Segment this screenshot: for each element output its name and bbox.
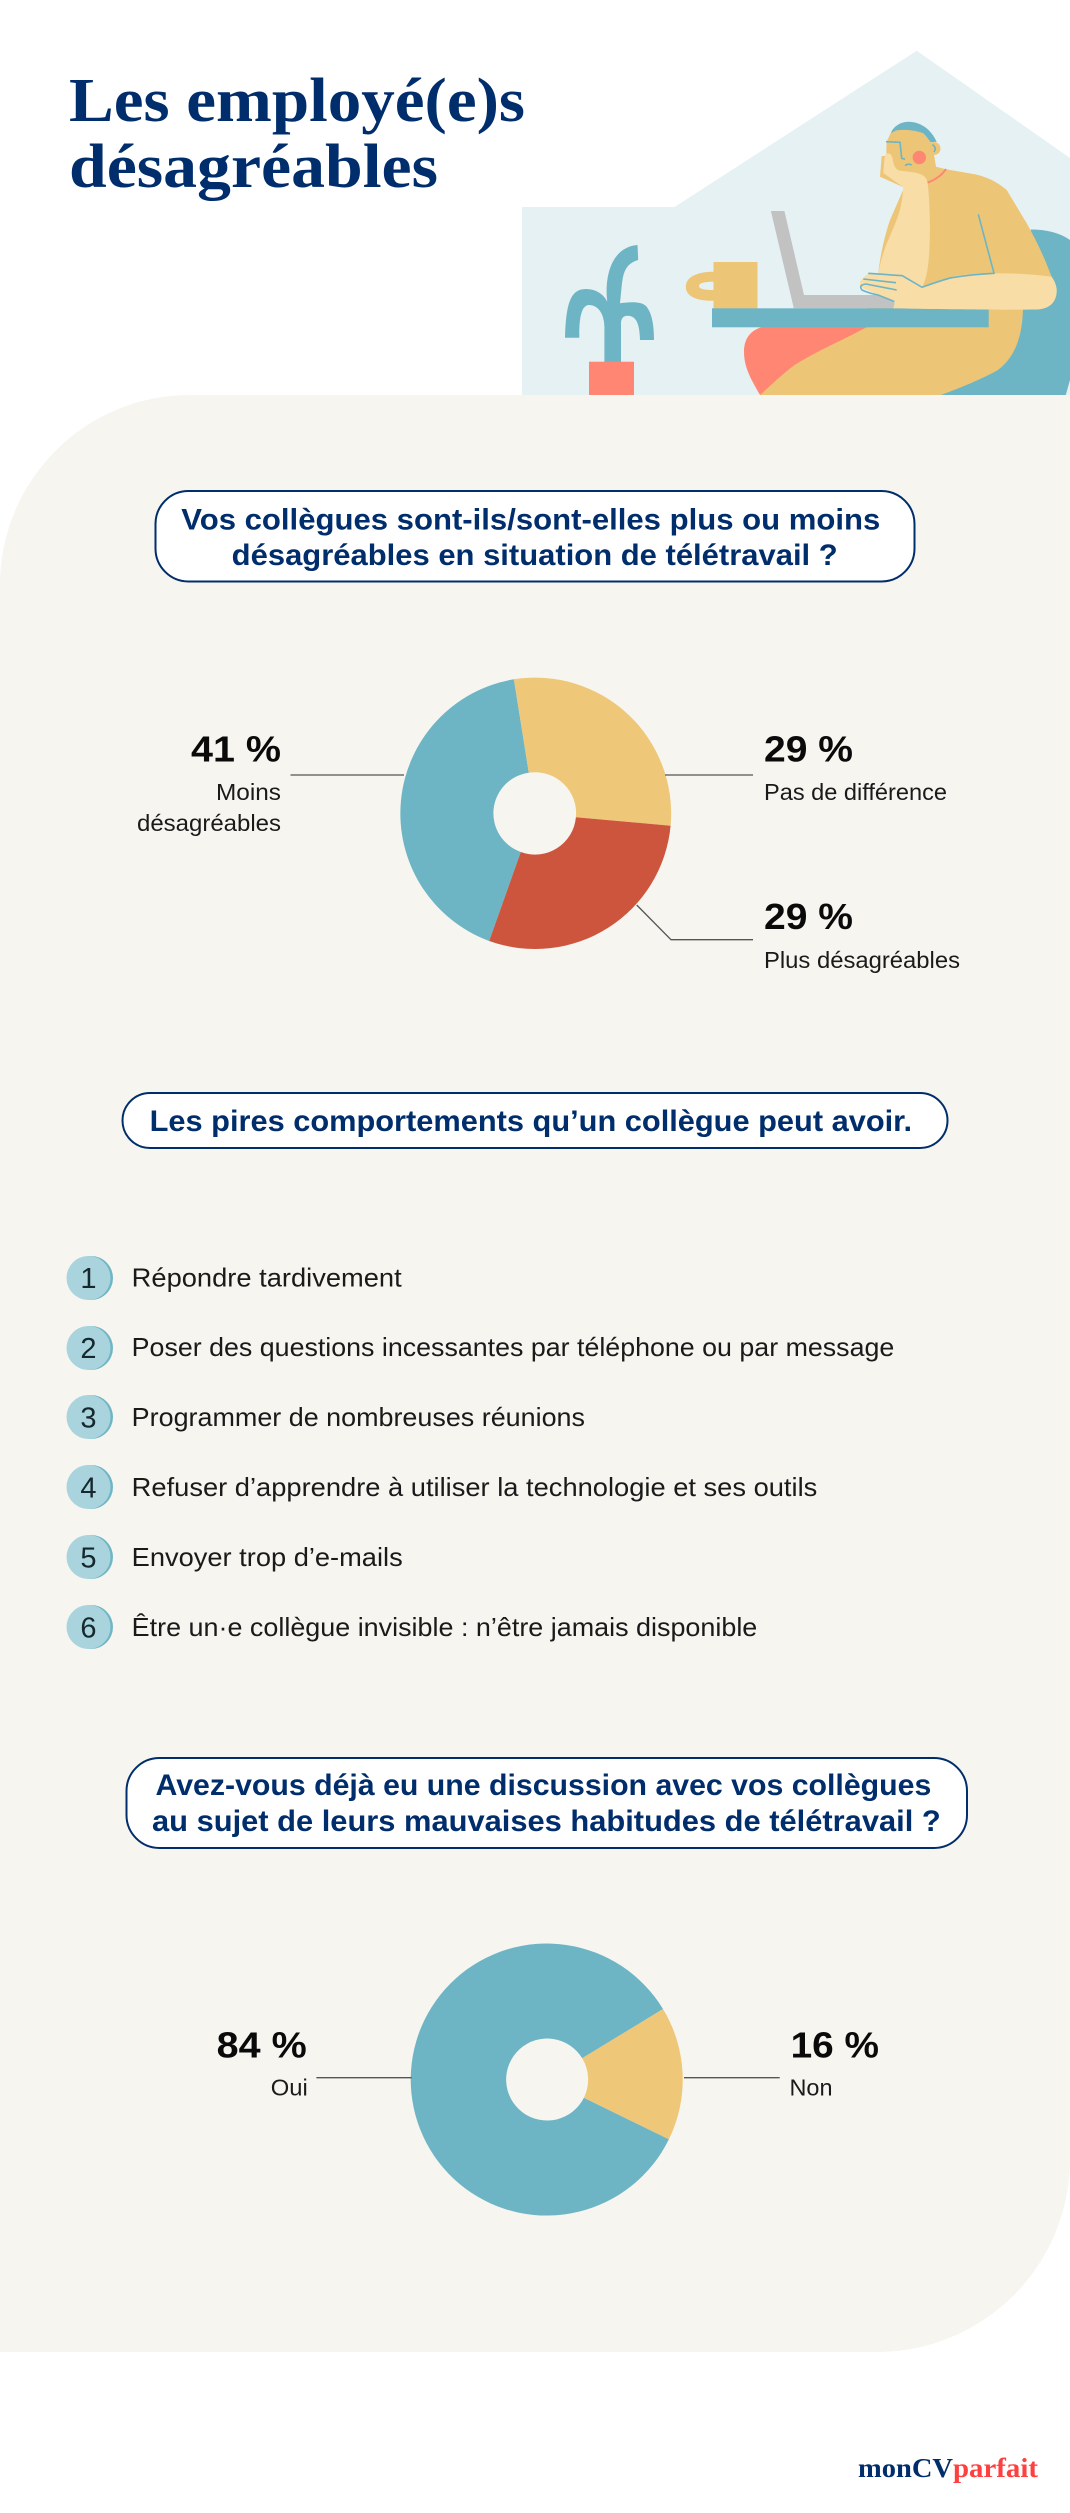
- question 3 heading: [126, 1758, 967, 1848]
- label: 41 %: désagréables: [137, 810, 281, 836]
- item 1: 1: [80, 1263, 97, 1295]
- label: 29 % plus désagréables: 29 %: [764, 896, 853, 937]
- leader lines chart 1: [290, 775, 753, 940]
- question 1 heading: désagréables en situation de télétravail ?: [232, 539, 838, 572]
- torso: [878, 155, 1052, 290]
- item 6: [66, 1605, 757, 1649]
- label: 84 % oui: Oui: [271, 2075, 308, 2101]
- logo: monCV: [858, 2453, 954, 2483]
- house background: [522, 51, 1070, 400]
- panel: main background: [0, 395, 1070, 2352]
- item 6: Être un·e collègue invisible : n’être jamais disponible: [132, 1612, 757, 1642]
- icon: plant: [565, 245, 654, 396]
- leader lines chart 2: [316, 2077, 780, 2079]
- arm and finger lines: [861, 214, 994, 302]
- label: 84 % oui: [217, 2025, 308, 2101]
- illustration: person at laptop in a house: [522, 51, 1070, 400]
- label: 29 % pas de différence: Pas de différence: [764, 779, 947, 805]
- label: 29 % pas de différence: 29 %: [764, 729, 853, 770]
- raised arm and hand: [878, 153, 930, 288]
- item 4: Refuser d’apprendre à utiliser la technologie et ses outils: [132, 1472, 817, 1502]
- label: 29 % pas de différence: [764, 729, 947, 805]
- label: 16 % non: [790, 2025, 879, 2101]
- item 2: 2: [80, 1333, 97, 1365]
- item 6: 6: [80, 1612, 97, 1644]
- item 3: 3: [80, 1402, 97, 1434]
- title: désagréables: [69, 133, 438, 201]
- logo: parfait: [953, 2453, 1038, 2483]
- question 2 heading: Les pires comportements qu’un collègue peut avoir.: [150, 1105, 912, 1138]
- item 5: [66, 1535, 403, 1579]
- item 5: Envoyer trop d’e-mails: [132, 1542, 403, 1572]
- donut chart 2: [411, 1944, 683, 2216]
- label: 29 % plus désagréables: Plus désagréables: [764, 947, 960, 973]
- question 1 heading: Vos collègues sont-ils/sont-elles plus ou moins: [181, 503, 880, 536]
- item 2: [66, 1326, 894, 1370]
- head: [886, 122, 946, 183]
- question 2 heading: [122, 1093, 948, 1148]
- question 3 heading: au sujet de leurs mauvaises habitudes de télétravail ?: [152, 1805, 941, 1838]
- label: 84 % oui: 84 %: [217, 2025, 307, 2066]
- item 2: Poser des questions incessantes par téléphone ou par message: [132, 1332, 894, 1362]
- coral leg: [744, 327, 880, 395]
- item 1: [66, 1256, 403, 1300]
- title: Les employé(e)s: [69, 67, 525, 135]
- item 4: [66, 1465, 817, 1509]
- question 1 heading: [156, 491, 914, 582]
- title: [69, 67, 525, 201]
- item 3: Programmer de nombreuses réunions: [132, 1402, 585, 1432]
- yellow leg: [760, 305, 1023, 396]
- item 5: 5: [80, 1542, 97, 1574]
- logo: [858, 2453, 1038, 2483]
- question 3 heading: Avez-vous déjà eu une discussion avec vos collègues: [156, 1769, 931, 1802]
- item 1: Répondre tardivement: [132, 1263, 403, 1293]
- icon: mug: [686, 262, 758, 309]
- chair: [930, 230, 1070, 396]
- label: 16 % non: Non: [790, 2075, 832, 2101]
- icon: laptop: [771, 211, 894, 308]
- item 4: 4: [80, 1472, 97, 1504]
- label: 41 %: [137, 729, 281, 836]
- item 3: [66, 1395, 585, 1439]
- label: 29 % plus désagréables: [764, 896, 960, 973]
- label: 41 %: 41 %: [191, 729, 281, 770]
- label: 41 %: Moins: [216, 779, 281, 805]
- label: 16 % non: 16 %: [791, 2025, 879, 2066]
- desk: [712, 308, 989, 327]
- donut chart 1: [400, 678, 671, 949]
- ranked list: [66, 1256, 894, 1649]
- lower arm and hand: [860, 273, 1057, 310]
